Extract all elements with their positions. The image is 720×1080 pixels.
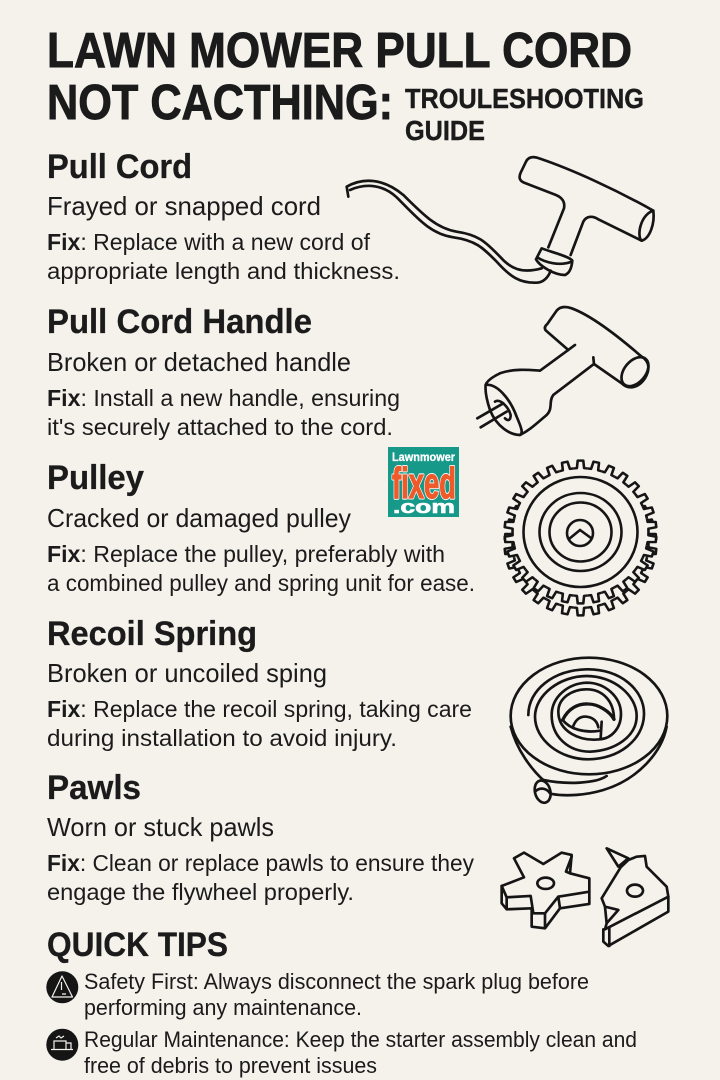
text: regular maintenance: Regular Maintenance: Keep the starter assembly clean and — [84, 1027, 637, 1052]
fix: pulley: Fix: Replace the pulley, preferably with — [47, 541, 445, 567]
problem: pull cord handle: Broken or detached handle — [47, 347, 351, 377]
heading: pull cord handle: Pull Cord Handle — [47, 303, 312, 341]
fix: recoil spring: during installation to avoid injury. — [47, 725, 397, 751]
subtitle — [405, 83, 644, 146]
logo: lawnmower fixed .com: Lawnmower — [392, 450, 455, 464]
icon: starter assembly — [46, 1029, 78, 1061]
fix: pull cord: Fix: Replace with a new cord of — [47, 229, 370, 255]
icon: triangular pawl — [602, 848, 668, 946]
tip: safety first — [46, 969, 589, 1020]
icon: toothed pulley — [504, 461, 657, 615]
fix: pulley: a combined pulley and spring unit for ease. — [47, 570, 475, 596]
fix: pawls — [47, 850, 474, 905]
problem: pull cord: Frayed or snapped cord — [47, 191, 321, 221]
fix: recoil spring: Fix: Replace the recoil spring, taking care — [47, 696, 472, 722]
heading: quick tips: QUICK TIPS — [47, 926, 228, 964]
problem: pawls: Worn or stuck pawls — [47, 812, 274, 842]
text: safety first: Safety First: Always disconnect the spark plug before — [84, 969, 589, 994]
fix: pulley — [47, 541, 475, 596]
fix: pull cord — [47, 229, 400, 284]
heading: pulley: Pulley — [47, 459, 144, 497]
title — [47, 24, 632, 130]
fix: pawls: engage the flywheel properly. — [47, 879, 354, 905]
icon: star pawl — [502, 853, 589, 928]
heading: recoil spring: Recoil Spring — [47, 615, 257, 653]
fix: pull cord: appropriate length and thickness. — [47, 258, 400, 284]
section: pawls — [47, 769, 474, 905]
text: safety first — [84, 969, 589, 1020]
tip: regular maintenance — [46, 1027, 637, 1078]
section: pull cord — [47, 148, 400, 284]
subtitle: TROULESHOOTING — [405, 83, 644, 114]
fix: pull cord handle — [47, 385, 400, 440]
fix: pull cord handle: Fix: Install a new handle, ensuring — [47, 385, 400, 411]
logo: lawnmower fixed .com — [388, 447, 459, 517]
logo: lawnmower fixed .com: .com — [393, 497, 455, 517]
icon: recoil spring — [511, 658, 667, 805]
fix: pull cord handle: it's securely attached to the cord. — [47, 414, 393, 440]
text: regular maintenance — [84, 1027, 637, 1078]
heading: pawls: Pawls — [47, 769, 141, 807]
subtitle: GUIDE — [405, 115, 485, 146]
section: pulley — [47, 459, 475, 596]
section: pull cord handle — [47, 303, 400, 440]
problem: recoil spring: Broken or uncoiled sping — [47, 658, 327, 688]
title: LAWN MOWER PULL CORD — [47, 24, 632, 78]
title: NOT CACTHING: — [47, 76, 393, 130]
icon: detached handle — [477, 307, 654, 435]
icon: pull cord with t-handle — [347, 157, 654, 283]
fix: pawls: Fix: Clean or replace pawls to ensure they — [47, 850, 474, 876]
text: safety first: performing any maintenance. — [84, 995, 362, 1020]
fix: recoil spring — [47, 696, 472, 751]
logo: lawnmower fixed .com: fixed — [392, 459, 456, 508]
problem: pulley: Cracked or damaged pulley — [47, 503, 351, 533]
icon: warning triangle — [46, 971, 78, 1003]
logo: lawnmower fixed .com: fixed — [392, 459, 456, 508]
section: recoil spring — [47, 615, 472, 751]
heading: pull cord: Pull Cord — [47, 148, 192, 186]
text: regular maintenance: free of debris to prevent issues — [84, 1053, 377, 1078]
